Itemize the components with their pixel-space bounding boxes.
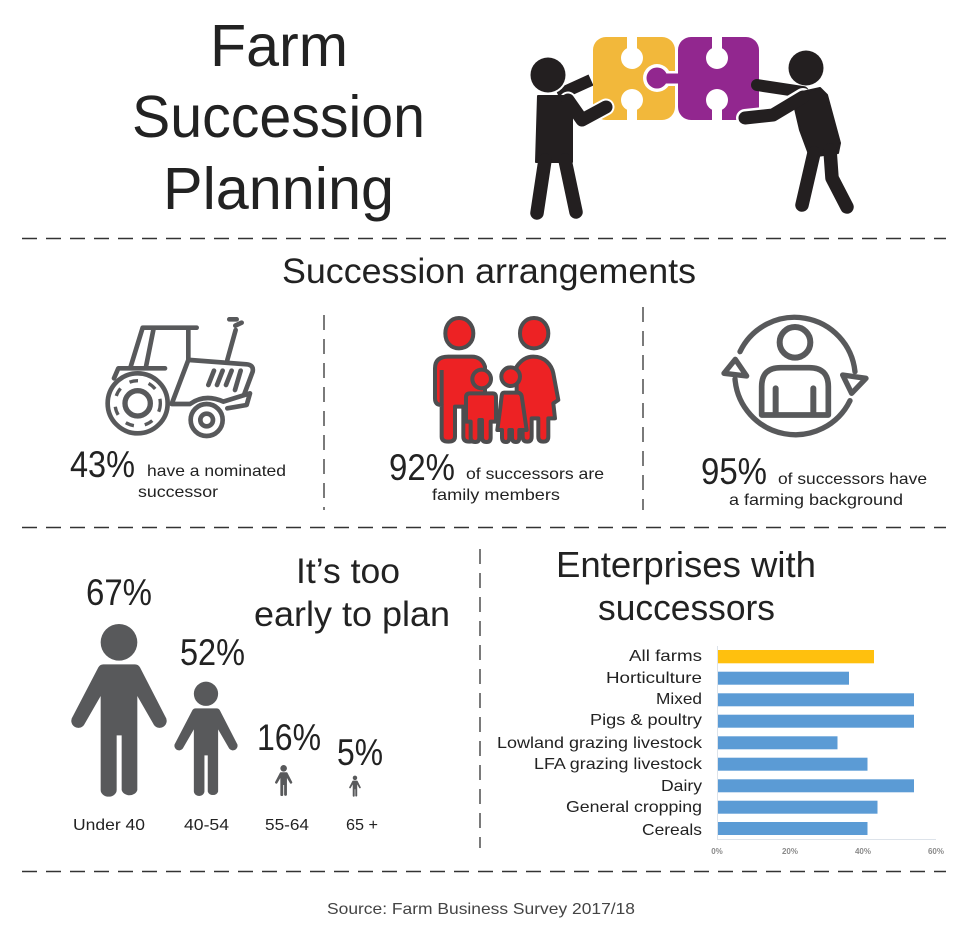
purple puzzle piece — [643, 37, 759, 120]
axis tick labels: 60% — [928, 847, 944, 856]
figure: 55-64 — [275, 765, 292, 796]
pictogram: too early to plan by age — [71, 572, 383, 834]
bar chart: enterprises with successors — [497, 646, 944, 856]
stat: 95% farming background: a farming background — [729, 492, 903, 509]
figure: 40-54 — [174, 682, 238, 796]
divider — [22, 870, 946, 872]
divider — [22, 238, 946, 240]
axis tick labels — [711, 847, 944, 856]
category labels: Dairy — [661, 778, 702, 795]
category labels: General cropping — [566, 799, 702, 816]
category labels: Horticulture — [606, 670, 702, 687]
stat: 95% farming background: of successors have — [778, 471, 927, 488]
heading: it's too early to plan: early to plan — [254, 595, 450, 634]
age labels: Under 40 — [73, 817, 145, 834]
stat: 92% family members: family members — [432, 487, 560, 504]
yellow puzzle piece — [593, 37, 675, 120]
title: Farm — [210, 13, 348, 79]
percentages: 5% — [337, 732, 383, 773]
figure: 65 + — [349, 776, 361, 797]
percentages: 16% — [257, 717, 321, 758]
left person back arm — [558, 80, 591, 95]
title — [132, 13, 425, 222]
heading: it's too early to plan — [254, 552, 450, 634]
stat: 92% family members: of successors are — [466, 466, 604, 483]
stat: 92% family members: 92% — [389, 447, 455, 488]
stat: 92% family members — [389, 447, 604, 504]
age labels: 65 + — [346, 817, 378, 834]
daughter — [497, 367, 527, 442]
axis tick labels: 40% — [855, 847, 871, 856]
mother — [517, 318, 558, 442]
divider — [479, 549, 481, 848]
father — [435, 318, 485, 442]
category labels — [497, 648, 703, 839]
stat: 95% farming background: 95% — [701, 451, 767, 492]
icon: tractor — [108, 319, 253, 436]
category labels: Pigs & poultry — [590, 712, 702, 729]
heading: it's too early to plan: It’s too — [296, 552, 400, 591]
icon: two people joining puzzle pieces — [528, 37, 847, 213]
right person — [745, 50, 847, 207]
percentages: 67% — [86, 572, 152, 613]
axis tick labels: 20% — [782, 847, 798, 856]
stat: 43% nominated successor: 43% — [70, 444, 135, 485]
son — [466, 370, 496, 442]
divider — [642, 307, 644, 510]
stat: 43% nominated successor — [70, 444, 286, 501]
heading: enterprises with successors — [556, 544, 816, 628]
figure: under 40 — [71, 624, 167, 797]
heading: enterprises with successors: successors — [598, 587, 775, 628]
stat: 43% nominated successor: successor — [138, 484, 219, 501]
bars — [718, 650, 914, 835]
heading: enterprises with successors: Enterprises with — [556, 544, 816, 585]
percentages — [86, 572, 383, 773]
divider — [22, 526, 946, 528]
stat: 43% nominated successor: have a nominated — [147, 463, 286, 480]
category labels: Mixed — [656, 691, 702, 708]
category labels: Cereals — [642, 822, 702, 839]
left person — [528, 56, 606, 213]
heading: succession arrangements: Succession arrangements — [282, 252, 696, 291]
axis tick labels: 0% — [711, 847, 723, 856]
icon: person in cycle arrows — [724, 317, 866, 435]
age labels: 55-64 — [265, 817, 309, 834]
icon: family — [435, 318, 558, 442]
axes — [718, 646, 936, 840]
percentages: 52% — [180, 632, 245, 673]
age labels — [73, 817, 378, 834]
title: Succession — [132, 84, 425, 150]
stat: 95% farming background — [701, 451, 927, 509]
category labels: Lowland grazing livestock — [497, 735, 703, 752]
category labels: LFA grazing livestock — [534, 756, 703, 773]
age labels: 40-54 — [184, 817, 229, 834]
category labels: All farms — [629, 648, 702, 665]
source note: Source: Farm Business Survey 2017/18 — [327, 901, 635, 918]
title: Planning — [163, 156, 394, 222]
divider — [323, 315, 325, 510]
